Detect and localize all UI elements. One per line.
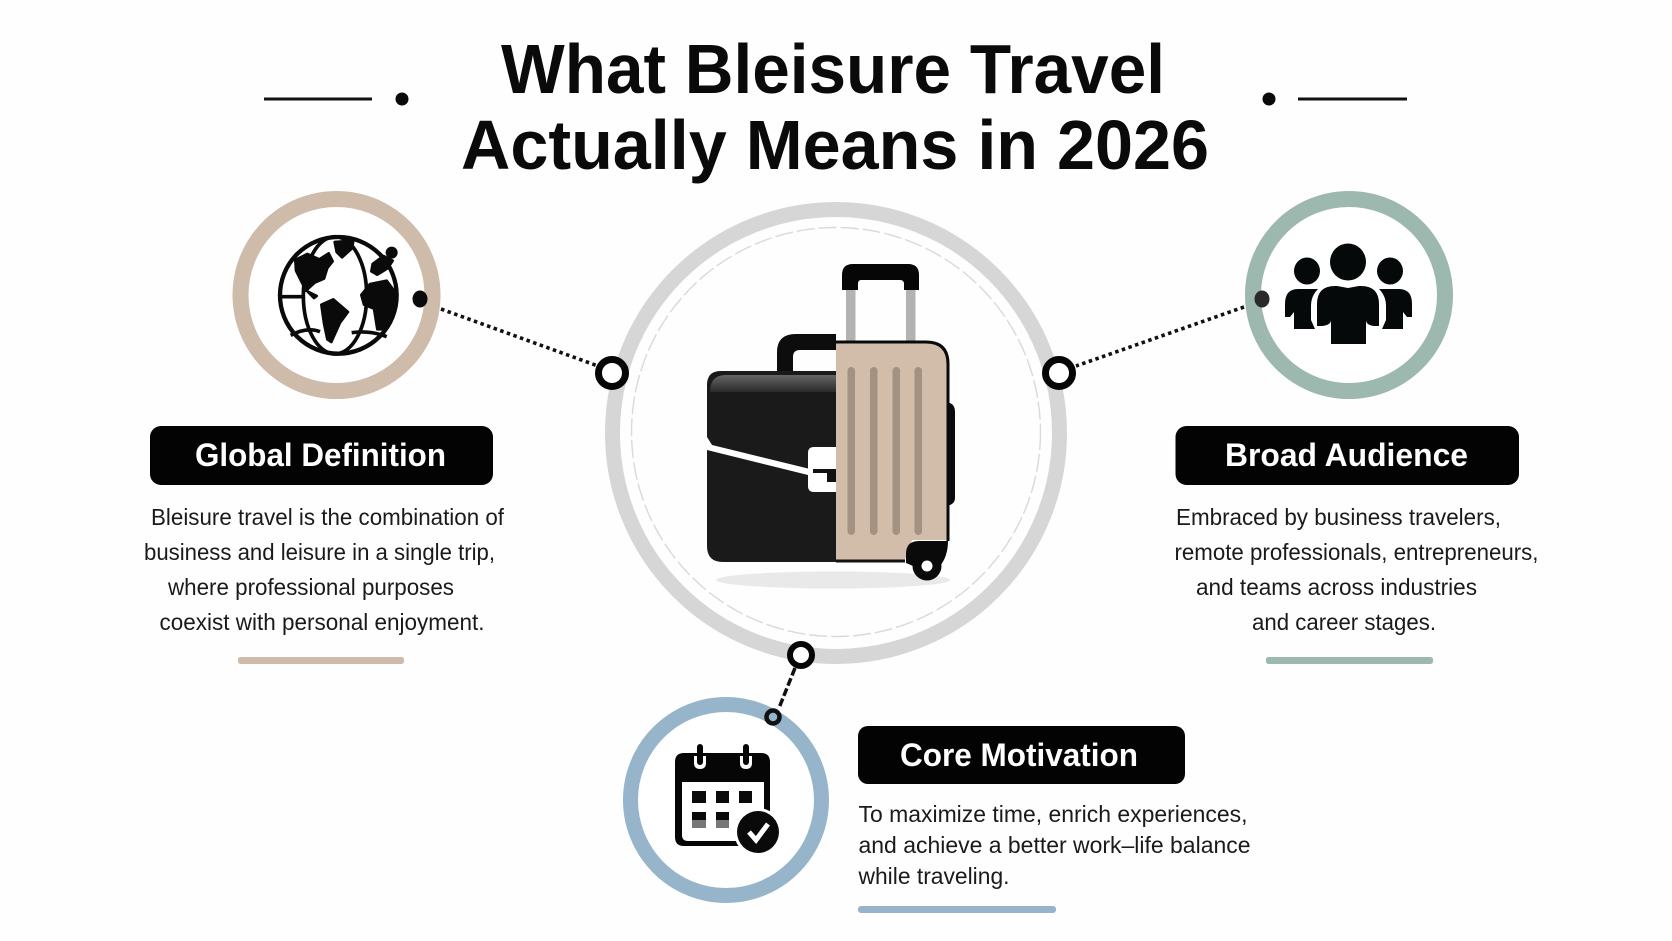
body text: and career stages.	[1252, 609, 1436, 635]
body text: remote professionals, entrepreneurs,	[1174, 539, 1538, 565]
heading pill: Broad Audience	[1225, 437, 1468, 473]
body text: To maximize time, enrich experiences,	[858, 801, 1248, 827]
body text: coexist with personal enjoyment.	[160, 609, 484, 635]
body text	[144, 504, 505, 635]
title ornament: left	[264, 92, 408, 106]
body text	[858, 801, 1250, 889]
title ornament: right	[1262, 92, 1407, 106]
title: What Bleisure Travel	[501, 30, 1165, 108]
body text: while traveling.	[858, 863, 1010, 889]
body text: Bleisure travel is the combination of	[151, 504, 505, 530]
heading pill	[150, 426, 493, 485]
icon: calendar	[675, 744, 782, 856]
panel: core motivation	[858, 726, 1250, 913]
central icon: briefcase and suitcase	[707, 264, 955, 588]
ring: broad audience	[1253, 199, 1445, 391]
body text: where professional purposes	[167, 574, 454, 600]
icon: people	[1285, 244, 1412, 344]
connector: left	[441, 309, 626, 386]
heading pill	[1176, 426, 1519, 485]
title: Actually Means in 2026	[461, 106, 1209, 184]
suitcase handle	[842, 264, 919, 290]
body text	[1174, 504, 1538, 635]
shadow	[716, 572, 950, 588]
body text: business and leisure in a single trip,	[144, 539, 495, 565]
accent bar	[238, 657, 404, 664]
central ring	[612, 210, 1060, 656]
body text: and achieve a better work–life balance	[858, 832, 1250, 858]
briefcase body	[707, 371, 836, 562]
heading pill: Global Definition	[195, 437, 446, 473]
suitcase shell	[836, 343, 947, 560]
body text: Embraced by business travelers,	[1176, 504, 1501, 530]
title	[461, 30, 1209, 184]
connector: bottom	[766, 644, 812, 724]
briefcase highlight	[710, 375, 836, 392]
panel: global definition	[144, 426, 505, 664]
briefcase strap	[707, 437, 808, 475]
panel: broad audience	[1174, 426, 1538, 664]
telescoping poles	[846, 288, 856, 344]
briefcase clasp	[808, 447, 836, 492]
connector: right	[1046, 307, 1244, 386]
suitcase ribs	[848, 367, 855, 535]
accent bar	[1266, 657, 1433, 664]
body text: and teams across industries	[1196, 574, 1477, 600]
wheel	[906, 541, 948, 572]
ring: core motivation	[630, 704, 822, 896]
ring: global definition	[240, 199, 432, 391]
side bumper	[945, 403, 955, 505]
heading pill	[858, 726, 1185, 784]
heading pill: Core Motivation	[900, 737, 1138, 773]
accent bar	[858, 906, 1056, 913]
briefcase handle	[777, 334, 836, 372]
icon: globe	[280, 237, 398, 354]
